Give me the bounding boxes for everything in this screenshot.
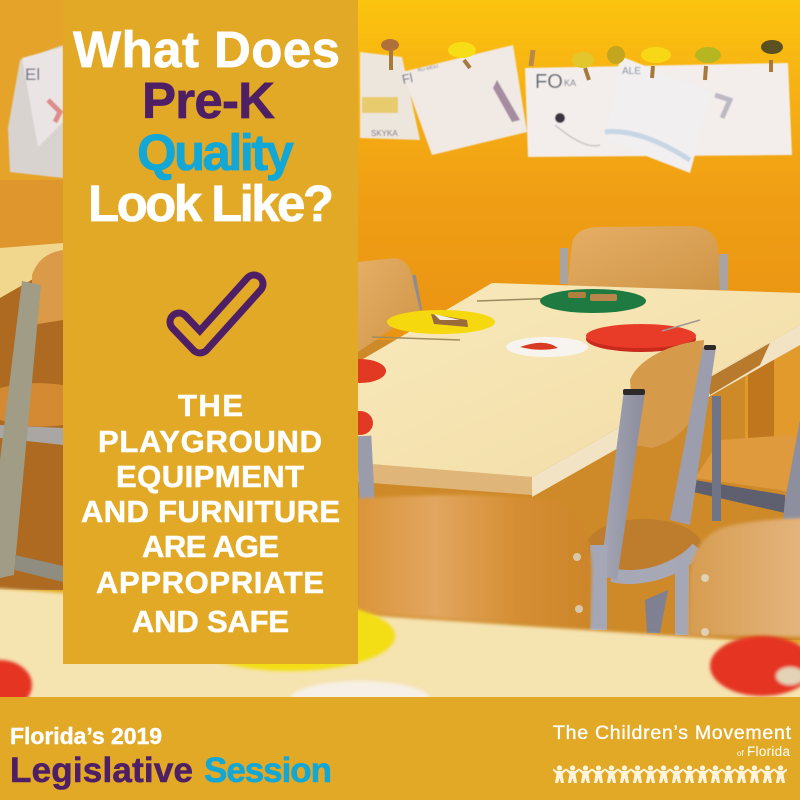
logo: The Children's Movement of Florida: The Children’s Movement <box>553 722 792 744</box>
text block: statement: AND SAFE <box>132 604 289 639</box>
logo: The Children's Movement of Florida: of <box>737 749 744 758</box>
children's drawings: Fl <box>401 70 414 87</box>
clothespins <box>381 39 783 80</box>
text block: statement: EQUIPMENT <box>116 459 304 494</box>
plates and food <box>334 289 700 500</box>
icon: check mark <box>179 284 254 344</box>
children's drawings: KA <box>564 78 576 88</box>
footer heading: Legislative Session <box>10 751 332 790</box>
text block: statement: THE <box>178 388 243 423</box>
text block: statement <box>81 388 340 639</box>
title: Quality <box>137 124 295 181</box>
foreground chairs <box>340 495 800 637</box>
icon: paper chain of children <box>553 765 787 783</box>
back chair <box>560 226 728 292</box>
footer heading: Florida's 2019: Florida’s 2019 <box>10 723 162 749</box>
children's drawings <box>8 45 792 178</box>
left chair and table (behind panel) <box>0 180 63 590</box>
footer heading: Legislative Session: Session <box>204 751 332 790</box>
title: What Does <box>73 21 340 78</box>
text block: statement: AND FURNITURE <box>81 494 340 529</box>
left drawing <box>8 45 63 178</box>
text block: statement: ARE AGE <box>142 529 279 564</box>
middle chair <box>586 340 716 635</box>
children's drawings: RU-MEKI <box>417 64 439 74</box>
title: Pre-K <box>142 72 275 129</box>
children's drawings: ALE <box>622 66 641 77</box>
logo: The Children's Movement of Florida: Florida <box>747 744 790 759</box>
wall <box>0 0 800 400</box>
panel: left gold column <box>63 0 358 664</box>
footer heading: Legislative Session: Legislative <box>10 751 193 790</box>
title <box>73 21 340 232</box>
children's drawings: SKYKA <box>371 129 398 138</box>
under-table area <box>358 340 800 640</box>
text block: statement: APPROPRIATE <box>96 565 324 600</box>
text block: statement: PLAYGROUND <box>98 424 322 459</box>
children's drawings: FO <box>535 71 563 93</box>
foreground table <box>0 587 800 720</box>
foreground plates <box>0 601 800 717</box>
main table <box>358 283 800 497</box>
far right chair <box>693 396 800 521</box>
logo: The Children's Movement of Florida <box>553 722 792 783</box>
footer band <box>0 697 800 800</box>
left back chair <box>358 258 422 352</box>
children's drawings: El <box>25 65 40 84</box>
title: Look Like? <box>88 175 334 232</box>
